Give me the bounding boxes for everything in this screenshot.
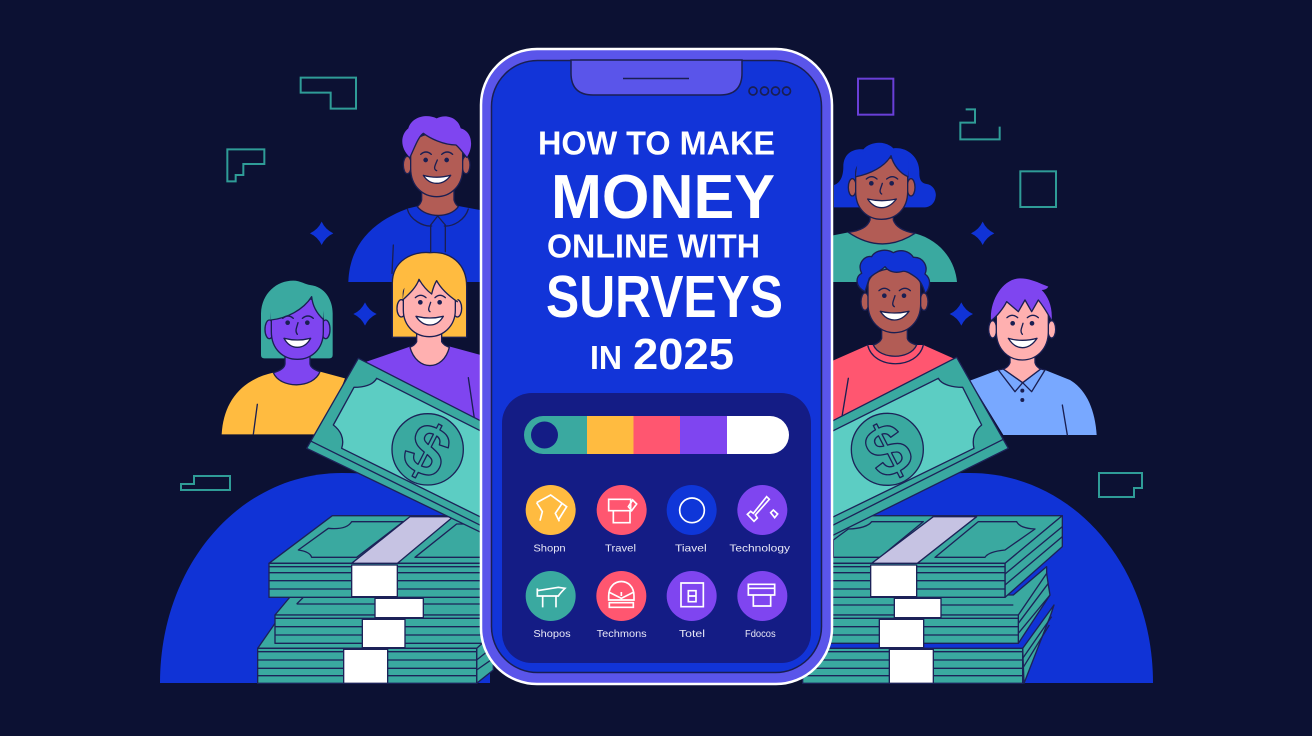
- icon: Technology: [737, 485, 787, 535]
- icon: Shopos: [526, 571, 576, 621]
- icon labels: Technology: [729, 543, 791, 554]
- icon labels: Techmons: [597, 629, 647, 640]
- phone frame: [481, 49, 832, 684]
- inner panel: [502, 393, 811, 663]
- title: MONEY: [551, 163, 775, 232]
- icon: Techmons: [596, 571, 646, 621]
- left dollar bill: [307, 358, 493, 538]
- person: man with purple hair: [348, 116, 483, 282]
- right money stack: [800, 516, 1062, 683]
- phone: [481, 49, 832, 684]
- dollar sign: $: [391, 406, 463, 496]
- icon labels: Travel: [605, 543, 636, 554]
- notch speaker line: [623, 78, 689, 80]
- category icons: [526, 485, 791, 640]
- title: 2025: [633, 330, 734, 379]
- icon: Tobel: [667, 571, 717, 621]
- left decorative outlines and sparkles: [227, 78, 377, 326]
- left blue dome: [160, 473, 490, 683]
- right group of people: [827, 143, 1097, 435]
- icon: Fdocos: [737, 571, 787, 621]
- title: SURVEYS: [546, 264, 783, 330]
- title: HOW TO MAKE: [538, 124, 775, 162]
- phone screen: [492, 60, 822, 672]
- icon: Tiavel: [667, 485, 717, 535]
- right decorative outlines and sparkles: [858, 79, 1056, 326]
- person: man with curly blue hair: [827, 250, 953, 427]
- person: blonde woman: [367, 252, 487, 423]
- icon labels: Totel: [679, 629, 705, 640]
- icon labels: Fdocos: [745, 629, 776, 640]
- left money stack: [258, 516, 493, 683]
- right small outline shape: [1099, 473, 1142, 497]
- phone notch: [571, 60, 742, 95]
- icon labels: [533, 543, 791, 640]
- camera dots: [749, 87, 790, 95]
- icon: Travel: [597, 485, 647, 535]
- title: IN: [590, 339, 622, 376]
- left group of people: [222, 116, 487, 434]
- colour progress bar: [524, 416, 789, 454]
- title: [538, 124, 783, 379]
- dollar sign: $: [852, 406, 924, 496]
- right blue dome: [820, 473, 1153, 683]
- right dollar bill: [820, 357, 1008, 542]
- title: ONLINE WITH: [547, 228, 760, 264]
- person: woman with teal hair: [222, 281, 345, 434]
- person: man with purple hair and light blue shirt: [970, 278, 1097, 435]
- left small outline shape: [181, 476, 230, 490]
- person: woman with blue hair: [827, 143, 957, 282]
- icon labels: Shopn: [533, 543, 566, 554]
- icon labels: Shopos: [533, 629, 571, 640]
- icon labels: Tiavel: [675, 543, 707, 554]
- icon: Shopn: [526, 485, 576, 535]
